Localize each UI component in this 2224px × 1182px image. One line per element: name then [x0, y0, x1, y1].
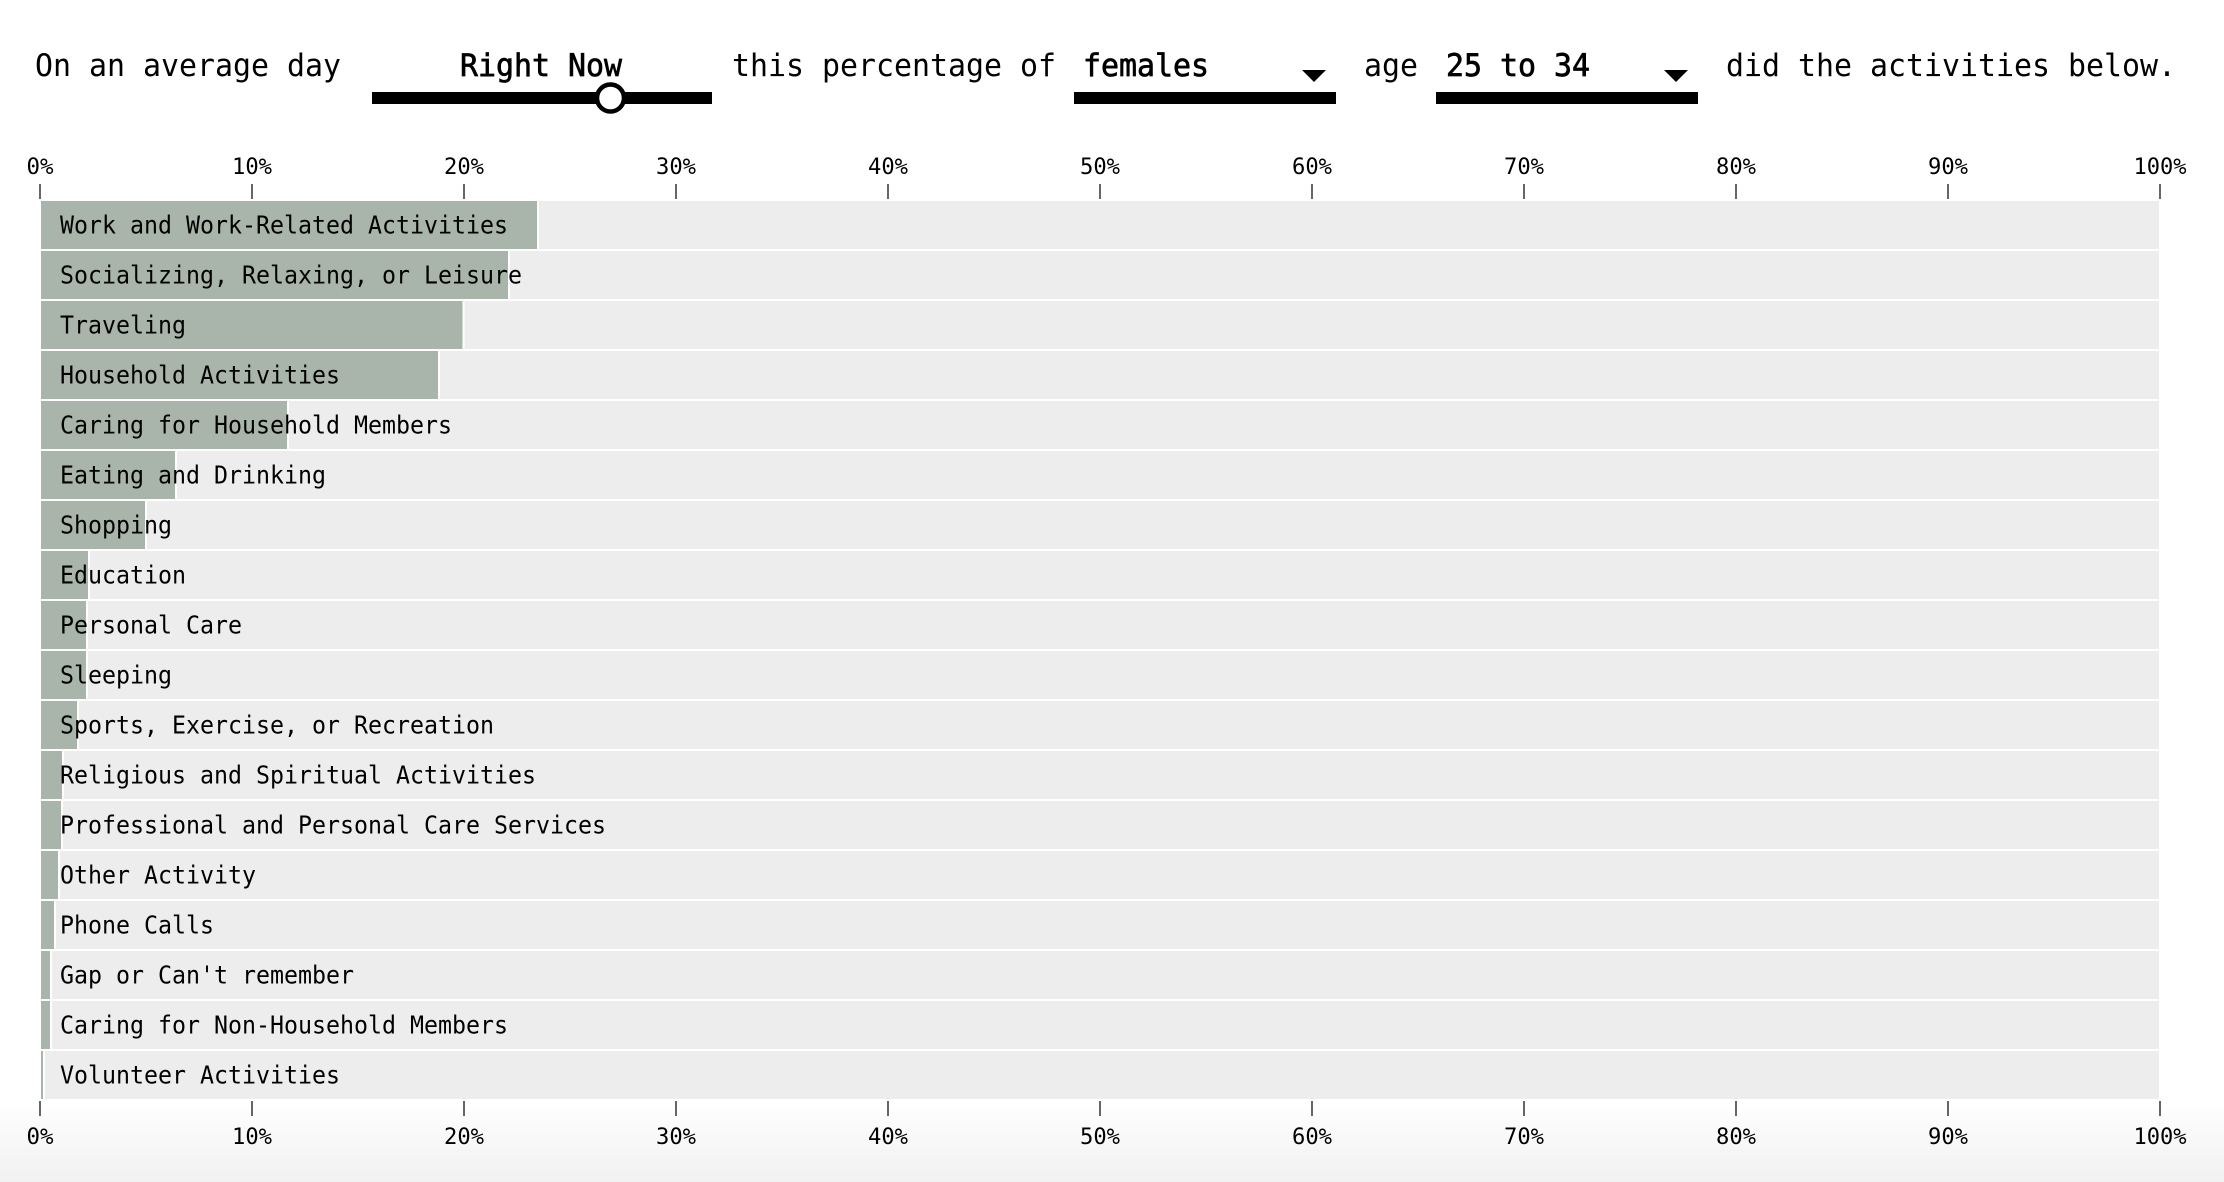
bottom axis: 40% — [868, 1125, 908, 1150]
slider track — [372, 92, 712, 104]
row: Household Activities — [41, 351, 2159, 399]
bottom axis: 10% — [232, 1125, 272, 1150]
top axis: 100% — [2134, 155, 2186, 180]
row: Personal Care: Personal Care — [60, 610, 242, 640]
bottom axis: 100% — [2134, 1125, 2186, 1150]
row: Work and Work-Related Activities — [41, 201, 2159, 249]
bottom axis: 30% — [656, 1125, 696, 1150]
row: Sports, Exercise, or Recreation — [41, 701, 2159, 749]
row: Education: Education — [60, 560, 186, 590]
top axis: 20% — [444, 155, 484, 180]
text: on an average day: On an average day — [35, 48, 341, 84]
dropdown value: females — [1083, 48, 1209, 84]
row: Caring for Non-Household Members: Caring for Non-Household Members — [60, 1010, 508, 1040]
row: Work and Work-Related Activities: Work and Work-Related Activities — [60, 210, 508, 240]
top axis: 80% — [1716, 155, 1756, 180]
row: Caring for Household Members — [41, 401, 2159, 449]
dropdown arrow — [1302, 70, 1326, 82]
bar chart — [41, 201, 2159, 1099]
row: Caring for Household Members: Caring for Household Members — [60, 410, 452, 440]
top axis: 50% — [1080, 155, 1120, 180]
row: Caring for Non-Household Members — [41, 1001, 2159, 1049]
row: Personal Care — [41, 601, 2159, 649]
dropdown value: 25 to 34 — [1446, 48, 1590, 84]
control: age dropdown — [1436, 48, 1698, 104]
top axis: 70% — [1504, 155, 1544, 180]
row: Sleeping — [41, 651, 2159, 699]
bottom axis — [26, 1101, 2186, 1150]
bottom axis: 70% — [1504, 1125, 1544, 1150]
text: age: age — [1364, 48, 1418, 84]
row: Socializing, Relaxing, or Leisure: Socializing, Relaxing, or Leisure — [60, 260, 522, 290]
bottom axis: 80% — [1716, 1125, 1756, 1150]
row: Phone Calls — [41, 901, 2159, 949]
top axis: 0% — [26, 155, 54, 180]
dropdown underline — [1436, 92, 1698, 104]
bottom axis: 0% — [26, 1125, 54, 1150]
dropdown arrow — [1664, 70, 1688, 82]
row: Education — [41, 551, 2159, 599]
control: gender dropdown — [1074, 48, 1336, 104]
bottom axis: 60% — [1292, 1125, 1332, 1150]
row: Other Activity — [41, 851, 2159, 899]
row: Shopping: Shopping — [60, 510, 172, 540]
row: Gap or Can't remember — [41, 951, 2159, 999]
control: time slider — [372, 48, 712, 112]
top axis: 10% — [232, 155, 272, 180]
row: Phone Calls: Phone Calls — [60, 910, 214, 940]
row: Volunteer Activities: Volunteer Activities — [60, 1060, 340, 1090]
row: Shopping — [41, 501, 2159, 549]
dropdown underline — [1074, 92, 1336, 104]
top axis: 90% — [1928, 155, 1968, 180]
bottom axis: 20% — [444, 1125, 484, 1150]
top axis: 30% — [656, 155, 696, 180]
top axis: 40% — [868, 155, 908, 180]
bottom axis: 90% — [1928, 1125, 1968, 1150]
heading sentence with controls — [35, 48, 2176, 112]
top axis: 60% — [1292, 155, 1332, 180]
row: Eating and Drinking — [41, 451, 2159, 499]
row: Volunteer Activities — [41, 1051, 2159, 1099]
bottom axis: 50% — [1080, 1125, 1120, 1150]
row: Sports, Exercise, or Recreation: Sports, Exercise, or Recreation — [60, 710, 494, 740]
row: Religious and Spiritual Activities: Religious and Spiritual Activities — [60, 760, 536, 790]
slider label: Right Now — [460, 48, 622, 84]
row: Professional and Personal Care Services: Professional and Personal Care Services — [60, 810, 606, 840]
text: did the activities below: did the activities below. — [1726, 48, 2176, 84]
row: Sleeping: Sleeping — [60, 660, 172, 690]
top axis — [26, 155, 2186, 199]
text: this percentage of: this percentage of — [732, 48, 1056, 84]
slider thumb — [597, 84, 624, 112]
row: Other Activity: Other Activity — [60, 860, 256, 890]
row: Household Activities: Household Activities — [60, 360, 340, 390]
row: Traveling — [41, 301, 2159, 349]
row: Professional and Personal Care Services — [41, 801, 2159, 849]
row: Traveling: Traveling — [60, 310, 186, 340]
row: Gap or Can't remember: Gap or Can't remember — [60, 960, 354, 990]
row: Socializing, Relaxing, or Leisure — [41, 251, 2159, 299]
row: Eating and Drinking: Eating and Drinking — [60, 460, 326, 490]
row: Religious and Spiritual Activities — [41, 751, 2159, 799]
